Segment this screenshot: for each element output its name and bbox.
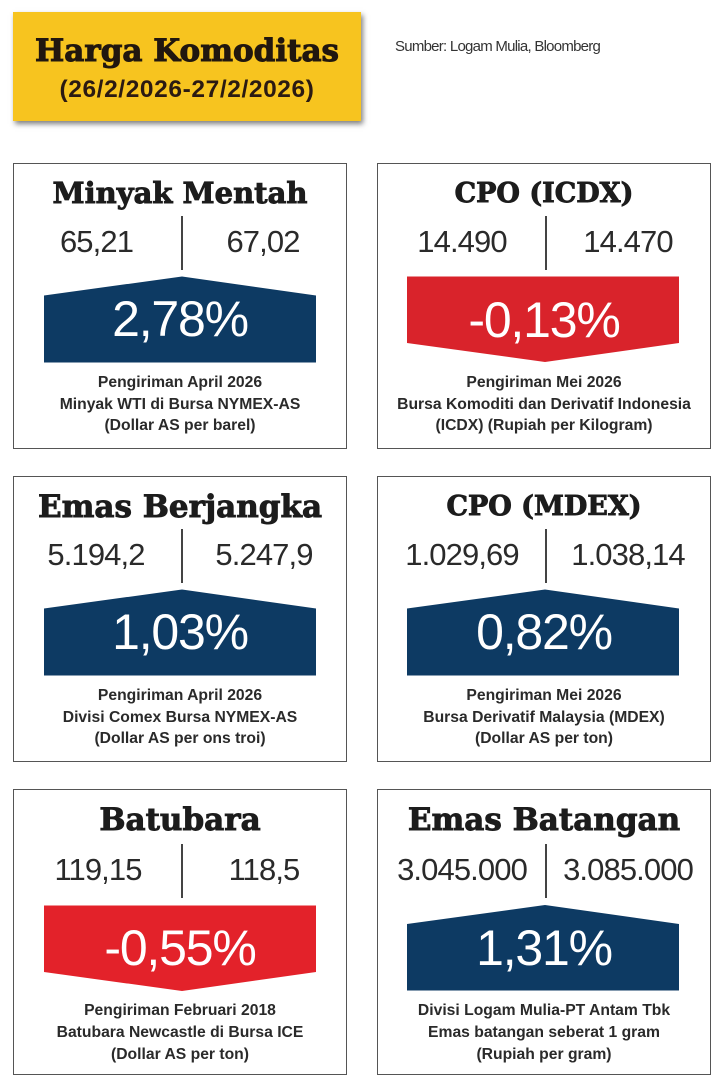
value: previous: 1.029,69 bbox=[405, 537, 519, 572]
caption: Batubara Newcastle di Bursa ICE bbox=[57, 1024, 303, 1041]
caption: Pengiriman Februari 2018 bbox=[84, 1002, 276, 1019]
value: latest: 118,5 bbox=[229, 852, 299, 887]
heading: Emas Berjangka bbox=[38, 489, 322, 525]
panel: Emas Batangan bbox=[377, 789, 711, 1075]
panel: CPO ICDX bbox=[377, 163, 711, 449]
caption: Bursa Derivatif Malaysia (MDEX) bbox=[423, 708, 665, 726]
value divider bbox=[181, 216, 183, 270]
up arrow bbox=[407, 905, 679, 990]
percentage: 1,03% bbox=[112, 604, 248, 660]
heading: CPO (MDEX) bbox=[446, 491, 642, 522]
percentage: -0,13% bbox=[468, 292, 620, 348]
panel: Minyak Mentah bbox=[13, 163, 347, 449]
down arrow bbox=[407, 276, 679, 362]
value: previous: 119,15 bbox=[54, 852, 142, 887]
value: previous: 14.490 bbox=[417, 224, 507, 259]
heading: Harga Komoditas bbox=[35, 33, 339, 69]
value: latest: 5.247,9 bbox=[215, 537, 313, 572]
down arrow bbox=[44, 906, 316, 991]
value divider bbox=[181, 844, 183, 898]
caption: (ICDX) (Rupiah per Kilogram) bbox=[435, 417, 652, 434]
caption: Minyak WTI di Bursa NYMEX-AS bbox=[60, 396, 300, 412]
caption bbox=[418, 1002, 670, 1063]
value divider bbox=[545, 844, 547, 898]
caption bbox=[57, 1002, 303, 1063]
caption: Pengiriman Mei 2026 bbox=[466, 687, 622, 704]
title banner bbox=[13, 12, 361, 121]
caption: (Rupiah per gram) bbox=[476, 1046, 612, 1063]
heading: CPO (ICDX) bbox=[455, 178, 633, 209]
date range: (26/2/2026-27/2/2026) bbox=[59, 76, 315, 103]
up arrow bbox=[44, 276, 316, 362]
caption: (Dollar AS per ton) bbox=[111, 1046, 249, 1063]
value: latest: 14.470 bbox=[583, 224, 673, 259]
heading: Emas Batangan bbox=[408, 802, 680, 838]
value divider bbox=[545, 529, 547, 583]
value: latest: 67,02 bbox=[226, 224, 300, 259]
panel: Emas Berjangka bbox=[13, 476, 347, 762]
panel: CPO MDEX bbox=[377, 476, 711, 762]
percentage: 2,78% bbox=[112, 291, 248, 347]
caption: (Dollar AS per barel) bbox=[104, 417, 256, 434]
percentage: -0,55% bbox=[104, 920, 256, 976]
value: previous: 5.194,2 bbox=[47, 537, 145, 572]
percentage: 1,31% bbox=[476, 920, 612, 976]
caption bbox=[60, 374, 300, 434]
caption bbox=[397, 374, 691, 434]
caption: Divisi Logam Mulia-PT Antam Tbk bbox=[418, 1002, 670, 1019]
value: latest: 3.085.000 bbox=[563, 852, 693, 887]
percentage: 0,82% bbox=[476, 604, 612, 660]
caption bbox=[63, 687, 297, 747]
caption: (Dollar AS per ton) bbox=[475, 730, 613, 747]
caption: Pengiriman April 2026 bbox=[98, 687, 262, 704]
value divider bbox=[545, 216, 547, 270]
value: previous: 3.045.000 bbox=[397, 852, 527, 887]
caption: Pengiriman April 2026 bbox=[98, 374, 262, 391]
up arrow bbox=[44, 590, 316, 676]
caption: (Dollar AS per ons troi) bbox=[94, 730, 266, 747]
caption: Bursa Komoditi dan Derivatif Indonesia bbox=[397, 396, 691, 412]
up arrow bbox=[407, 590, 679, 676]
value: previous: 65,21 bbox=[60, 224, 133, 259]
caption bbox=[423, 687, 665, 747]
value: latest: 1.038,14 bbox=[571, 537, 685, 572]
value divider bbox=[181, 529, 183, 583]
heading: Batubara bbox=[99, 802, 261, 838]
heading: Minyak Mentah bbox=[53, 176, 307, 210]
panel: Batubara bbox=[13, 789, 347, 1075]
caption: Divisi Comex Bursa NYMEX-AS bbox=[63, 708, 297, 726]
caption: Pengiriman Mei 2026 bbox=[466, 374, 622, 391]
source note: Sumber: Logam Mulia, Bloomberg bbox=[395, 38, 600, 55]
caption: Emas batangan seberat 1 gram bbox=[428, 1024, 660, 1041]
